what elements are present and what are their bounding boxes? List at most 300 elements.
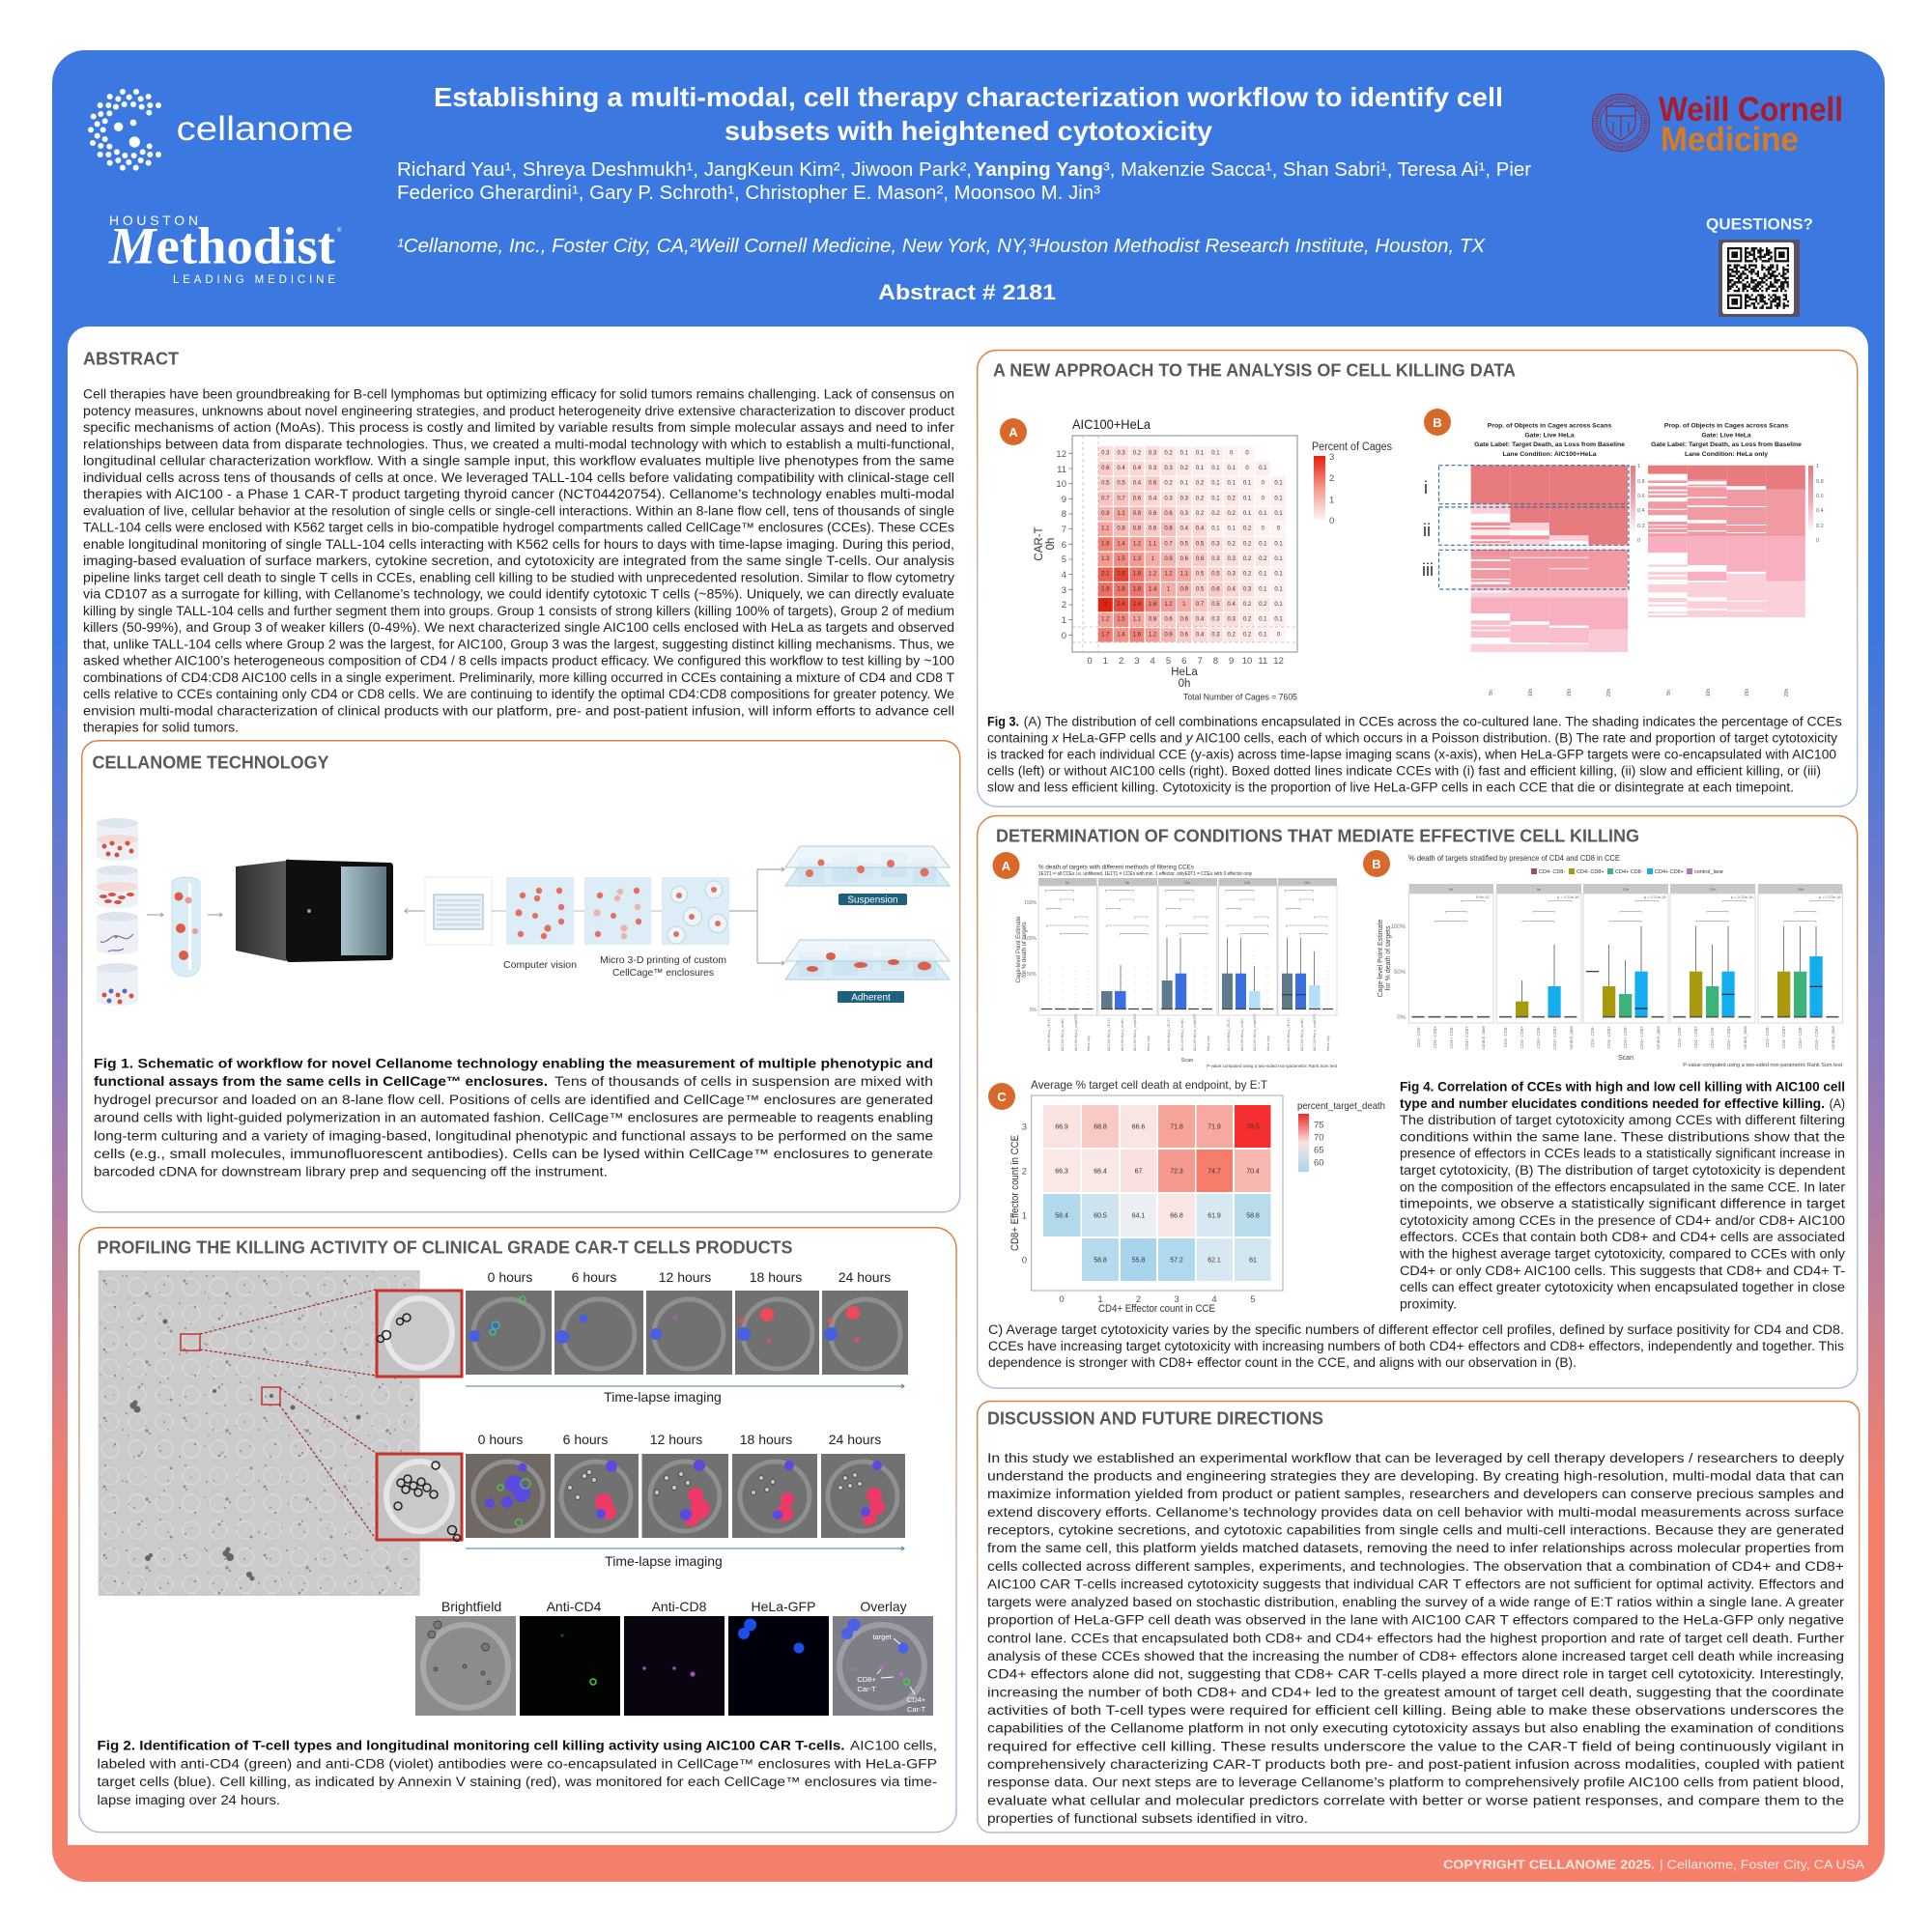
chart: box plots by CD4 and CD8 presence: control_lane: [1743, 1026, 1747, 1050]
chart: box plots by filtering method: 150%: [1024, 900, 1037, 906]
chart: box plots by filtering method: 15h: [1244, 880, 1250, 885]
chart: cell combination heatmap: 0.2: [1228, 496, 1236, 501]
text block: discussion body: CD4+ effectors alone did not, suggesting that CD8+ CAR T-cells played a more direct role in target cell cytotoxicity. Interestingly,: [987, 1667, 1844, 1682]
chart: cell combination heatmap: 10: [1056, 479, 1066, 490]
chart: cell combination heatmap: 0.2: [1243, 556, 1252, 562]
chart: box plots by filtering method: 0%: [1030, 1008, 1037, 1013]
text block: figure 4 caption: proximity.: [1400, 1296, 1457, 1311]
label: micro 3-D printing: CellCage™ enclosures: [612, 967, 714, 979]
chart: box plots by CD4 and CD8 presence: CD4- CD8+: [1433, 1026, 1437, 1048]
text block: abstract body: individual cells across tens of thousands of cells at once. We leveraged TALL-104 cells before validating compatibility with clinical-stage cell: [83, 470, 954, 485]
text block: figure 4 caption: conditions within the same lane. These distributions show that the: [1400, 1129, 1845, 1144]
text block: figure 4 caption: type and number elucidates conditions needed for effective killing.: [1400, 1096, 1825, 1111]
text block: figure 2 caption: Fig 2. Identification of T-cell types and longitudinal monitoring cell killing activity using AIC100 CAR T-cells.: [97, 1739, 844, 1752]
chart: effector:target heatmap: CD4+ Effector count in CCE: [1098, 1303, 1215, 1315]
chart: effector:target heatmap: 64.1: [1132, 1213, 1145, 1219]
chart: box plots by filtering method: 5h: [1125, 880, 1129, 885]
chart: cell combination heatmap: 0.3: [1149, 450, 1157, 456]
text block: figure 4 caption: presence of effectors in CCEs leads to a statistically significant increase in: [1400, 1147, 1845, 1161]
text block: discussion body: control lane. CCEs that encapsulated both CD8+ and CD4+ effectors had the highest proportion and rate of target cell death. Further: [987, 1631, 1845, 1645]
chart: cell combination heatmap: 4: [1151, 656, 1155, 667]
abstract number: Abstract # 2181: [878, 280, 1056, 304]
text block: abstract body: TALL-104 cells were enclosed with K562 target cells in bio-compatible hydrogel compartments called CellCage™ enclosures (CCEs). These CCEs: [83, 520, 954, 535]
channel labels: [441, 1599, 907, 1614]
text block: discussion body: evaluate what cellular and molecular predictors correlate with better or worse patient responses, and compare them to the: [987, 1793, 1844, 1807]
chart: box plots by CD4 and CD8 presence: p = 2.22e-16: [1557, 895, 1579, 899]
chart: cell combination heatmap: 0.2: [1164, 450, 1173, 456]
chart: cell combination heatmap: 0.3: [1228, 572, 1236, 578]
row 2 time labels: 18 hours: [740, 1432, 792, 1447]
image: channel panels: [415, 1616, 933, 1716]
chart: box plots by filtering method: AIC100+HeLa_onlyE0T1: [1133, 1013, 1137, 1051]
chart: cell combination heatmap: 0.6: [1164, 511, 1173, 517]
chart: box plots by filtering method: AIC100+HeLa_onlyE0T1: [1313, 1013, 1317, 1051]
chart: effector:target heatmap: 1: [1022, 1211, 1027, 1221]
text block: figure 1 caption: Tens of thousands of cells in suspension are mixed with: [554, 1074, 933, 1089]
chart: cell combination heatmap: 0.1: [1274, 541, 1283, 547]
chart: box plots by filtering method: HeLa only: [1087, 1036, 1091, 1051]
chart: cell combination heatmap: 0.1: [1180, 450, 1189, 456]
channel labels: Anti-CD8: [652, 1599, 707, 1614]
chart: cell combination heatmap: Total Number of Cages = 7605: [1183, 692, 1297, 703]
chart: cell combination heatmap: 0.1: [1274, 556, 1283, 562]
title: subsets with heightened cytotoxicity: [724, 116, 1212, 146]
chart: box plots by filtering method: % death of targets with different methods of filtering CCEs: [1038, 864, 1195, 871]
text block: discussion body: proportion of HeLa-GFP cell death was observed in the lane with AIC100 CAR T effectors compared to the HeLa-GFP only negative: [987, 1613, 1844, 1628]
chart: cell combination heatmap: 0.5: [1196, 541, 1205, 547]
chart: box plots by CD4 and CD8 presence: CD4+ CD8-: [1449, 1026, 1454, 1048]
chart: cell combination heatmap: 0.8: [1149, 617, 1157, 623]
chart: box plots by filtering method: AIC100+HeLa_1E1T1: [1047, 1018, 1051, 1051]
chart: cell combination heatmap: 1.1: [1133, 617, 1142, 623]
text block: discussion body: from the same cell, this platform yields matched datasets, removing the need to infer relationships across molecular properties from: [987, 1541, 1844, 1555]
icon: instrument: [236, 860, 393, 962]
chart: cytotoxicity heatmap, AIC100+HeLa: 20h: [1606, 689, 1612, 696]
chart: cell combination heatmap: 2: [1119, 656, 1123, 667]
authors: Richard Yau¹, Shreya Deshmukh¹, JangKeun Kim², Jiwoon Park²,: [397, 159, 972, 181]
text block: abstract body: relationships between data from disparate technologies. Thus, we created a multi-modal technology with which to establish a multi-functional,: [83, 437, 954, 451]
chart: box plots by filtering method: AIC100+HeLa_minE1: [1180, 1018, 1184, 1051]
chart: effector:target heatmap: 60: [1314, 1157, 1324, 1169]
chart: cell combination heatmap: 1.6: [1101, 541, 1110, 547]
chart: cell combination heatmap: 1.4: [1117, 541, 1125, 547]
chart: box plots by filtering method: AIC100+HeLa_minE1: [1300, 1018, 1304, 1051]
chart: cytotoxicity heatmap, AIC100+HeLa: 0.4: [1637, 508, 1645, 514]
chart: cell combination heatmap: HeLa: [1171, 667, 1198, 678]
chart: cell combination heatmap: 0.8: [1117, 526, 1125, 532]
footer: copyright: | Cellanome, Foster City, CA USA: [1660, 1857, 1864, 1872]
chart: cytotoxicity heatmap, HeLa only: 5h: [1666, 690, 1672, 696]
chart: effector:target heatmap: Average % target cell death at endpoint, by E:T: [1031, 1078, 1268, 1092]
chart: cell combination heatmap: 0.5: [1180, 541, 1189, 547]
chart: cell combination heatmap: 0.6: [1149, 511, 1157, 517]
chart: cell combination heatmap: 0h: [1179, 678, 1190, 690]
chart: box plots by CD4 and CD8 presence: CD4+ CD8+: [1464, 1026, 1469, 1050]
chart: cell combination heatmap: 1: [1103, 656, 1108, 667]
chart: effector:target heatmap: 70: [1314, 1132, 1324, 1144]
row 1 time labels: 18 hours: [750, 1269, 802, 1285]
text block: figure 1 caption: Fig 1. Schematic of workflow for novel Cellanome technology enabling the measurement of multiple phenotypic and: [94, 1057, 933, 1070]
chart: cytotoxicity heatmap, AIC100+HeLa: 0: [1637, 538, 1640, 544]
chart: cell combination heatmap: 1.2: [1149, 572, 1157, 578]
text block: figure 1 caption: around cells with light-guided polymerization in an automated fashion. CellCage™ enclosures are permeable to reagents enabling: [94, 1111, 933, 1125]
text block: discussion body: In this study we established an experimental workflow that can be leveraged by cell therapy developers / researchers to deeply: [987, 1451, 1844, 1465]
chart: effector:target heatmap: 57.2: [1170, 1258, 1183, 1264]
chart: cell combination heatmap: 0.3: [1180, 496, 1189, 501]
chart: cytotoxicity heatmap, HeLa only: Gate: Live HeLa: [1701, 433, 1751, 439]
text block: figure 4 caption: timepoints, we observe a statistically significant difference in target: [1400, 1197, 1845, 1211]
text block: figure 4 caption: with the highest average target cytotoxicity, compared to CCEs with only: [1399, 1246, 1845, 1262]
chart: cytotoxicity heatmap, HeLa only: [1648, 423, 1824, 696]
chart: box plots by CD4 and CD8 presence: 0h: [1449, 887, 1453, 892]
chart: cytotoxicity heatmap, HeLa only: 1: [1816, 464, 1819, 469]
chart: cell combination heatmap: 3: [1134, 656, 1140, 667]
badge A: [1000, 418, 1027, 445]
chart: cell combination heatmap: 0.3: [1164, 496, 1173, 501]
chart: cell combination heatmap: 0.2: [1180, 466, 1189, 471]
chart: box plots by CD4 and CD8 presence: CD4+ CD8-: [1536, 1026, 1541, 1048]
chart: cell combination heatmap: 1.1: [1180, 572, 1189, 578]
chart: cell combination heatmap: 6: [1181, 656, 1186, 667]
chart: cell combination heatmap: 1: [1182, 602, 1186, 608]
label: computer vision: Computer vision: [503, 959, 577, 971]
chart: cell combination heatmap: 0.1: [1259, 617, 1267, 623]
chart: cytotoxicity heatmap, HeLa only: 0.8: [1816, 479, 1824, 485]
chart: box plots by CD4 and CD8 presence: CD4- CD8-: [1765, 1026, 1770, 1047]
chart: cell combination heatmap: 0.3: [1211, 556, 1220, 562]
chart: cell combination heatmap: 0.8: [1133, 511, 1142, 517]
chart: box plots by filtering method: AIC100+HeLa_onlyE0T1: [1074, 1013, 1078, 1051]
text block: abstract body: imaging-based evaluation of surface markers, cytokine secretion, and cytotoxicity are integrated from the same single T-cells. Our analysis: [83, 554, 954, 568]
text block: discussion body: increasing the number of both CD8+ and CD4+ led to the greatest amount of target cell death, suggesting that the coordinate: [987, 1685, 1844, 1699]
label: suspension: Suspension: [847, 895, 898, 906]
row 1 time labels: 0 hours: [488, 1269, 532, 1285]
chart: cell combination heatmap: 0.1: [1243, 481, 1252, 487]
text block: abstract body: asked whether AIC100’s heterogeneous composition of CD4 / 8 cells impacts product efficacy. We configured this workflow to test killing by ~100: [83, 653, 954, 668]
text block: discussion body: [987, 1451, 1845, 1826]
text block: figure 4 caption: The distribution of target cytotoxicity among CCEs with different filtering: [1400, 1113, 1845, 1127]
chart: cell combination heatmap: 1.2: [1101, 617, 1110, 623]
text block: figure 1 caption: functional assays from the same cells in CellCage™ enclosures.: [94, 1074, 548, 1089]
schematic: workflow: [97, 818, 950, 1006]
chart: cytotoxicity heatmap, HeLa only: Gate Label: Target Death, as Loss from Baseline: [1651, 441, 1802, 448]
text block: figure 3 caption: [987, 715, 1842, 794]
callout: zoom lines and boxes: [181, 1290, 376, 1539]
chart: cytotoxicity heatmap, AIC100+HeLa: Lane Condition: AIC100+HeLa: [1503, 451, 1597, 458]
text block: abstract body: killers (50-99%), and Group 3 of weaker killers (0-49%). We next characterized single AIC100 cells enclosed with HeLa as targets and observed: [83, 620, 954, 635]
chart: cell combination heatmap: 9: [1229, 656, 1234, 667]
panel: analysis of cell killing data: [978, 350, 1858, 807]
chart: cytotoxicity heatmap, AIC100+HeLa: 0.2: [1637, 524, 1645, 529]
label: micro 3-D printing: Micro 3-D printing of custom: [600, 954, 726, 966]
logo: Weill Cornell Medicine: [1592, 91, 1843, 158]
image: time-lapse row 2: [466, 1454, 905, 1538]
chart: box plots by filtering method: P-value computed using a two-sided non-parametric Rank Sum test: [1207, 1064, 1338, 1068]
chart: effector:target heatmap: 4: [1211, 1294, 1217, 1305]
chart: cell combination heatmap: 0.9: [1164, 556, 1173, 562]
chart: effector:target heatmap: 74.7: [1208, 1169, 1221, 1175]
logo: Houston Methodist: Methodist: [108, 217, 335, 275]
chart: cell combination heatmap: 0.6: [1149, 481, 1157, 487]
chart: box plots by filtering method: 0h: [1065, 880, 1069, 885]
chart: cell combination heatmap: 0.3: [1243, 586, 1252, 592]
chart: cell combination heatmap: 0.1: [1211, 450, 1220, 456]
chart: cell combination heatmap: 3: [1329, 452, 1334, 463]
text block: discussion body: comprehensively characterizing CAR-T products both pre- and post-patient infusion across modalities, coupled with patient: [987, 1757, 1844, 1772]
chart: cell combination heatmap: 0.6: [1101, 466, 1110, 471]
chart: cell combination heatmap: 1: [1329, 495, 1334, 506]
chart: cell combination heatmap: 0.5: [1196, 572, 1205, 578]
text block: figure 4 caption: [1399, 1080, 1846, 1311]
chart: cell combination heatmap: 0: [1262, 526, 1265, 532]
chart: cell combination heatmap: 0.6: [1180, 632, 1189, 638]
chart: box plots by CD4 and CD8 presence: CD4- CD8+: [1781, 1026, 1786, 1048]
badge A: A: [1009, 425, 1018, 440]
label: micro 3-D printing: [600, 954, 726, 979]
chart: cell combination heatmap: 0.1: [1259, 586, 1267, 592]
text block: discussion body: activities of both T-cell types were required for efficient cell killing. Being able to make these observations underscores the: [987, 1703, 1844, 1718]
chart: box plots by filtering method: Cage-level Point Estimate: [1016, 916, 1022, 983]
chart: cell combination heatmap: 1.8: [1133, 586, 1142, 592]
affiliations: ¹Cellanome, Inc., Foster City, CA,²Weill Cornell Medicine, New York, NY,³Houston Methodist Research Institute, Houston, TX: [397, 236, 1486, 257]
text block: figure 4 caption: Fig 4. Correlation of CCEs with high and low cell killing with AIC100 cell: [1400, 1080, 1845, 1094]
image: channel panels: Car-T: [907, 1705, 925, 1714]
logo: Houston Methodist: HOUSTON: [109, 213, 198, 228]
chart: cell combination heatmap: 5: [1062, 554, 1066, 565]
chart: cell combination heatmap: 3: [1104, 602, 1108, 608]
arrow: time-lapse 2: [466, 1547, 904, 1550]
chart: box plots by CD4 and CD8 presence: CD4+ CD8-: [1798, 1026, 1803, 1048]
chart: cell combination heatmap: Percent of Cages: [1312, 441, 1392, 453]
chart: cell combination heatmap: 0.6: [1196, 556, 1205, 562]
chart: cell combination heatmap: 1.4: [1117, 632, 1125, 638]
text block: abstract body: therapies for solid tumors.: [83, 721, 239, 734]
chart: box plots by CD4 and CD8 presence: CD4- CD8-: [1416, 1026, 1421, 1047]
chart: cell combination heatmap: 0.1: [1274, 481, 1283, 487]
label: adherent: [838, 991, 904, 1003]
chart: cell combination heatmap: 0.4: [1180, 526, 1189, 532]
chart: cytotoxicity heatmap, AIC100+HeLa: [1471, 423, 1645, 696]
chart: box plots by CD4 and CD8 presence: control_lane: [1831, 1026, 1835, 1050]
chart: box plots by filtering method: 50%: [1027, 972, 1037, 978]
icon: suspension enclosure: [785, 846, 950, 886]
chart: cell combination heatmap: 0.9: [1180, 586, 1189, 592]
chart: box plots by CD4 and CD8 presence: 5.6e-12: [1476, 895, 1490, 899]
chart: cell combination heatmap: 0: [1262, 496, 1265, 501]
chart: cytotoxicity heatmap, AIC100+HeLa: Gate Label: Target Death, as Loss from Baseline: [1474, 441, 1625, 448]
chart: cell combination heatmap: 0.1: [1180, 481, 1189, 487]
chart: cell combination heatmap: 0.4: [1228, 586, 1236, 592]
title: [434, 82, 1503, 146]
chart: cell combination heatmap: 0: [1329, 516, 1334, 526]
chart: cell combination heatmap: 1.1: [1149, 541, 1157, 547]
chart: box plots by CD4 and CD8 presence: CD4- CD8+: [1693, 1026, 1698, 1048]
text block: discussion body: analysis of these CCEs showed that the increasing the number of CD8+ effectors alone increased target cell death while increasing: [987, 1649, 1844, 1663]
text block: discussion body: receptors, cytokine secretions, and cytotoxic capabilities from single cells and multi-cell interactions. Because they are generated: [987, 1522, 1844, 1537]
chart: box plots by filtering method: AIC100+HeLa_onlyE0T1: [1253, 1013, 1257, 1051]
text block: figure 2 caption: lapse imaging over 24 hours.: [97, 1793, 280, 1807]
image: time-lapse row 1: [466, 1291, 908, 1375]
chart: cell combination heatmap: 0.1: [1211, 526, 1220, 532]
chart: box plots by CD4 and CD8 presence: CD4- CD8+: [1520, 1026, 1524, 1048]
chart: box plots by filtering method: 20h: [1304, 880, 1310, 885]
chart: cytotoxicity heatmap, AIC100+HeLa: 15h: [1567, 689, 1573, 696]
chart: effector:target heatmap: 2: [1136, 1294, 1141, 1305]
chart: box plots by filtering method: 100%: [1024, 936, 1037, 942]
chart: cell combination heatmap: 0: [1245, 450, 1249, 456]
chart: box plots by CD4 and CD8 presence: p = 2.22e-16: [1819, 895, 1841, 899]
chart: cell combination heatmap: 0.8: [1133, 526, 1142, 532]
image: channel panels: target: [872, 1633, 893, 1641]
chart: effector:target heatmap: 58.8: [1246, 1213, 1260, 1219]
chart: cell combination heatmap: 0: [1062, 631, 1066, 641]
chart: cell combination heatmap: 0.2: [1243, 541, 1252, 547]
chart: cell combination heatmap: 0.5: [1117, 481, 1125, 487]
chart: cell combination heatmap: 0.1: [1259, 541, 1267, 547]
chart: cell combination heatmap: 0.2: [1228, 511, 1236, 517]
channel labels: Anti-CD4: [547, 1599, 602, 1614]
chart: cell combination heatmap: 0.3: [1149, 466, 1157, 471]
chart: box plots by filtering method: AIC100+HeLa_minE1: [1121, 1018, 1124, 1051]
channel labels: Brightfield: [441, 1599, 501, 1614]
channel labels: HeLa-GFP: [752, 1599, 815, 1614]
chart: cell combination heatmap: 0.3: [1117, 450, 1125, 456]
chart: cell combination heatmap: 0.4: [1228, 602, 1236, 608]
text block: figure 3 caption: cells (left) or without AIC100 cells (right). Boxed dotted lines indicate CCEs with (i) fast and efficient killing, (ii) slow and efficient killing, or (iii): [987, 763, 1821, 779]
chart: cell combination heatmap: 0.3: [1211, 541, 1220, 547]
text block: abstract body: Cell therapies have been groundbreaking for B-cell lymphomas but optimizing efficacy for solid tumors remains challenging. Lack of consensus on: [83, 386, 954, 402]
chart: effector:target heatmap: 78.5: [1246, 1124, 1260, 1130]
chart: cell combination heatmap: 0.8: [1164, 526, 1173, 532]
footer: copyright: COPYRIGHT CELLANOME 2025.: [1443, 1857, 1655, 1872]
text block: figure 3 caption: is tracked for each individual CCE (y-axis) across time-lapse imaging scans (x-axis), when HeLa-GFP targets were co-encapsulated with AIC100: [987, 748, 1836, 761]
panel: abstract: [83, 350, 955, 734]
badge C: [988, 1083, 1015, 1110]
chart: cell combination heatmap: 1.1: [1101, 526, 1110, 532]
chart: cell combination heatmap: 0.3: [1101, 450, 1110, 456]
chart: box plots by CD4 and CD8 presence: CD4- CD8-: [1677, 1026, 1682, 1047]
chart: box plots by CD4 and CD8 presence: CD4+ CD8-: [1615, 869, 1643, 875]
badge C: C: [997, 1090, 1007, 1104]
chart: effector:target heatmap: 55.8: [1132, 1258, 1145, 1264]
chart: cell combination heatmap: 1: [1062, 615, 1066, 626]
chart: cell combination heatmap: 1.7: [1101, 632, 1110, 638]
chart: cell combination heatmap: 0.7: [1164, 541, 1173, 547]
chart: box plots by filtering method: AIC100+HeLa_1E1T1: [1107, 1018, 1111, 1051]
chart: cell combination heatmap: CAR-T: [1034, 526, 1045, 561]
chart: cell combination heatmap: 0.1: [1274, 617, 1283, 623]
chart: effector:target heatmap: 0: [1022, 1256, 1027, 1265]
chart: effector:target heatmap: CD8+ Effector count in CCE: [1009, 1135, 1021, 1251]
chart: cell combination heatmap: 0.7: [1196, 602, 1205, 608]
text block: figure 1 caption: [94, 1057, 933, 1179]
chart: box plots by CD4 and CD8 presence: [1378, 853, 1843, 1068]
chart: box plots by filtering method: AIC100+HeLa_1E1T1: [1227, 1018, 1231, 1051]
chart: cell combination heatmap: 1.8: [1133, 572, 1142, 578]
chart: cell combination heatmap: 0.9: [1101, 511, 1110, 517]
row 2 time labels: 24 hours: [829, 1432, 881, 1447]
chart: box plots by filtering method: 1E1T1 = all CCEs i.e. unfiltered, 1E1T1 = CCEs with min. 1 effector, onlyE0T1 = CCEs with 0 effector only: [1038, 871, 1252, 877]
chart: cell combination heatmap: 1.4: [1149, 586, 1157, 592]
chart: effector:target heatmap: 72.3: [1170, 1169, 1183, 1175]
chart: effector:target heatmap: 3: [1022, 1122, 1027, 1132]
logo: Houston Methodist: ®: [337, 227, 342, 234]
chart: cell combination heatmap: 0.2: [1133, 450, 1142, 456]
chart: cell combination heatmap: 0.1: [1259, 511, 1267, 517]
row 2 time labels: [478, 1432, 881, 1447]
chart: cell combination heatmap: 0: [1277, 526, 1281, 532]
chart: cell combination heatmap: 0.1: [1211, 466, 1220, 471]
chart: box plots by CD4 and CD8 presence: 50%: [1394, 970, 1406, 976]
chart: cell combination heatmap: 0.2: [1243, 526, 1252, 532]
chart: cell combination heatmap: 0.7: [1117, 496, 1125, 501]
chart: cell combination heatmap: 2.5: [1117, 572, 1125, 578]
text block: abstract body: evaluation of live, cellular behavior at the resolution of single cells or single-cell interactions. Within an 8-lane flow cell, tens of thousands of single: [83, 503, 954, 518]
text block: abstract body: that, unlike TALL-104 cells where Group 2 was the largest, for AIC100, Group 3 was the largest, suggesting distinct killing mechanisms. Thus, we: [83, 637, 954, 651]
text block: abstract body: potency measures, unknowns about novel engineering strategies, and product heterogeneity drive extensive characterization to discover product: [83, 404, 954, 418]
chart: cell combination heatmap: 0.1: [1259, 466, 1267, 471]
chart: box plots by CD4 and CD8 presence: control_lane: [1656, 1026, 1661, 1050]
chart: cell combination heatmap: 2.4: [1117, 602, 1125, 608]
text block: discussion body: capabilities of the Cellanome platform in not only executing cytotoxicity assays but also enabling the examination of conditions: [987, 1721, 1844, 1736]
text block: panel C note: C) Average target cytotoxicity varies by the specific numbers of different effector cell profiles, defined by surface positivity for CD4 and CD8.: [988, 1322, 1844, 1337]
chart: cell combination heatmap: 0.5: [1211, 572, 1220, 578]
text block: abstract body: via CD107 as a surrogate for killing, with Cellanome’s technology, we could identify cytotoxic T cells (~85%). Uniquely, we can directly evaluate: [83, 587, 954, 601]
chart: cell combination heatmap: 0.4: [1133, 466, 1142, 471]
text block: figure 3 caption: Fig 3.: [987, 715, 1019, 728]
chart: box plots by filtering method: [1016, 864, 1338, 1068]
chart: effector:target heatmap: 66.9: [1055, 1124, 1068, 1130]
chart: cell combination heatmap: 1.2: [1164, 572, 1173, 578]
chart: box plots by CD4 and CD8 presence: CD4+ CD8+: [1814, 1026, 1819, 1050]
heading: technology: CELLANOME TECHNOLOGY: [93, 753, 328, 773]
chart: cytotoxicity heatmap, HeLa only: 10h: [1706, 689, 1712, 696]
chart: cytotoxicity heatmap, AIC100+HeLa: 10h: [1528, 689, 1534, 696]
chart: box plots by filtering method: AIC100+HeLa_1E1T1: [1167, 1018, 1171, 1051]
image: channel panels: CD4+: [907, 1695, 926, 1704]
text block: panel C note: [988, 1322, 1844, 1370]
text block: abstract body: cells relative to CCEs containing only CD4 or CD8 cells. We are continuing to identify the optimal CD4:CD8 compositions for greater potency. We: [83, 687, 954, 701]
chart: cell combination heatmap: 1.1: [1117, 511, 1125, 517]
chart: cell combination heatmap: 1.2: [1149, 632, 1157, 638]
chart: cell combination heatmap: 2.4: [1133, 602, 1142, 608]
chart: cell combination heatmap: 8: [1062, 509, 1066, 520]
chart: cell combination heatmap: 0.6: [1180, 556, 1189, 562]
text block: abstract body: enable longitudinal monitoring of single TALL-104 cells interacting with K562 cells for hours to days with time-lapse imaging. During this period,: [83, 537, 954, 552]
chart: cell combination heatmap: 7: [1062, 525, 1066, 535]
heading: determination of conditions: DETERMINATION OF CONDITIONS THAT MEDIATE EFFECTIVE CELL KILLING: [996, 827, 1639, 846]
chart: cell combination heatmap: 0: [1230, 450, 1234, 456]
chart: effector:target heatmap: 3: [1174, 1294, 1179, 1305]
chart: effector:target heatmap: [1009, 1078, 1385, 1315]
chart: cytotoxicity heatmap, AIC100+HeLa: 5h: [1489, 690, 1494, 696]
chart: effector:target heatmap: 0: [1059, 1294, 1065, 1305]
row 2 time labels: 12 hours: [650, 1432, 702, 1447]
chart: cytotoxicity heatmap, HeLa only: 0: [1816, 538, 1819, 544]
text block: figure 1 caption: barcoded cDNA for downstream library prep and sequencing off the instrument.: [94, 1165, 608, 1179]
chart: cell combination heatmap: 7: [1197, 656, 1203, 667]
text block: discussion body: targets were analyzed based on stochastic distribution, enabling the survey of a wide range of E:T ratios within a single lane. A greater: [987, 1595, 1845, 1609]
chart: box plots by CD4 and CD8 presence: 15h: [1710, 887, 1716, 892]
arrow: [405, 908, 425, 914]
white content area: [68, 327, 1868, 1845]
chart: box plots by filtering method: AIC100+HeLa_minE1: [1240, 1018, 1244, 1051]
chart: effector:target heatmap: 58.8: [1094, 1258, 1107, 1264]
callout: boxed killing groups i, ii, iii: [1422, 466, 1629, 589]
chart: cell combination heatmap: 0.7: [1101, 496, 1110, 501]
chart: box plots by CD4 and CD8 presence: P-value computed using a two-sided non-parametric Rank Sum test: [1683, 1063, 1842, 1068]
chart: box plots by CD4 and CD8 presence: CD4- CD8+: [1606, 1026, 1611, 1048]
